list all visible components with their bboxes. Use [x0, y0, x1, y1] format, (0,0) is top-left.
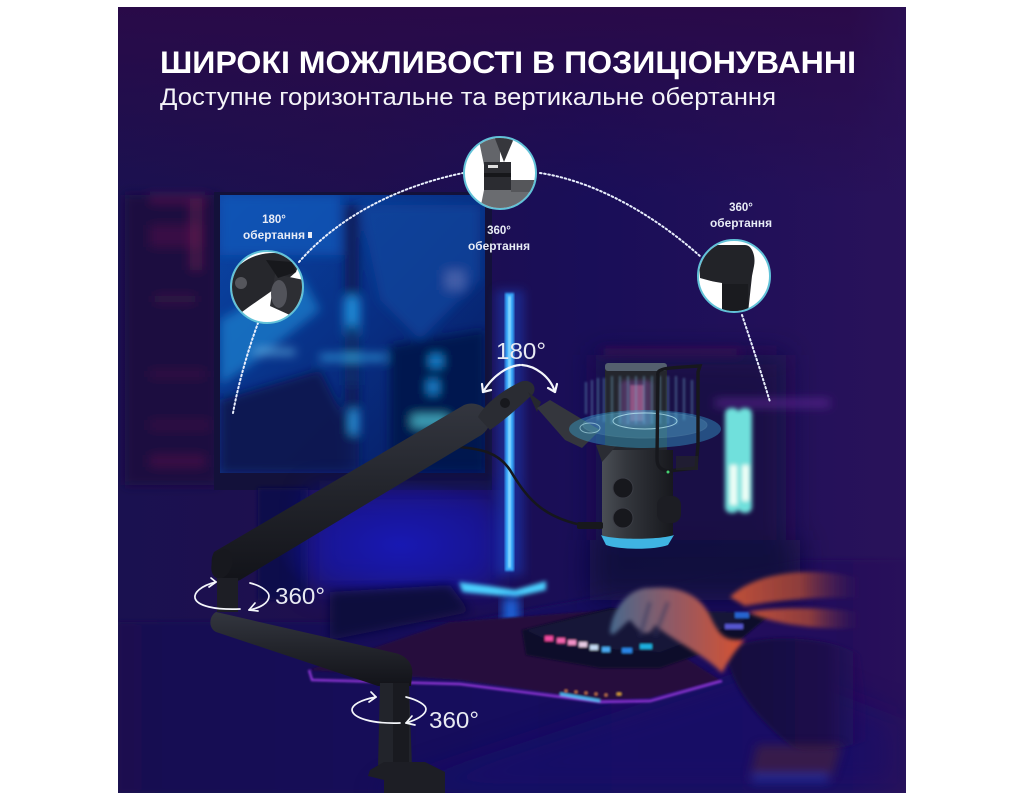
labels: top 360 degree rotation: обертання [468, 241, 530, 253]
callout: top joint detail [464, 136, 536, 210]
labels: right 360 degree rotation: 360° [729, 202, 753, 214]
labels: 180 degree rotation: 180° [262, 214, 286, 226]
panel: gaming desk background photo [118, 7, 906, 793]
knobs [613, 478, 633, 498]
label: upper 360 degrees: 360° [275, 583, 325, 609]
joint column [217, 578, 238, 612]
boom arm cable [460, 447, 600, 528]
labels: top 360 degree rotation [468, 225, 530, 253]
post [378, 683, 412, 767]
microphone [569, 363, 721, 549]
neon light stand [459, 290, 546, 626]
boom arm [207, 381, 600, 793]
labels: right 360 degree rotation [710, 202, 772, 230]
sleeve and forearm [728, 637, 850, 749]
clamp [368, 762, 445, 793]
capsule head [605, 368, 667, 450]
subtitle: Доступне горизонтальне та вертикальне обертання [160, 84, 776, 111]
blue wall glow behind stand [285, 485, 504, 593]
body [602, 450, 673, 547]
neck joint [478, 381, 535, 430]
labels: 180 degree rotation: обертання [243, 230, 305, 242]
sound bars [586, 376, 692, 424]
desk surface [229, 610, 542, 792]
label: 180 degrees: 180° [496, 338, 546, 364]
right edge fade [894, 7, 906, 44]
rotation arrow: lower 360 degrees [352, 692, 426, 725]
usb plug [577, 522, 603, 529]
grille [620, 380, 652, 426]
shock mount link [530, 395, 541, 412]
pop filter [657, 366, 700, 471]
hand on keyboard [610, 588, 745, 673]
second hand [730, 572, 860, 628]
wrist rest lower right [750, 745, 842, 782]
pivot cap [211, 564, 220, 578]
upper arm [212, 403, 490, 582]
dark table edge [538, 687, 880, 790]
title: ШИРОКІ МОЖЛИВОСТІ В ПОЗИЦІОНУВАННІ [160, 44, 856, 80]
callout: left joint detail [228, 251, 308, 323]
PC case glow [590, 355, 800, 600]
dotted rotation arcs [233, 173, 770, 413]
labels: 180 degree rotation [243, 214, 312, 242]
rotation arrow: 180 degrees [482, 365, 557, 392]
labels: top 360 degree rotation: 360° [487, 225, 511, 237]
teal base ring [601, 535, 674, 549]
keyboard [522, 608, 770, 668]
mousepad [309, 610, 722, 702]
monitor [214, 192, 492, 600]
lower arm [210, 612, 412, 686]
shelf on left wall [125, 195, 218, 485]
callout: right joint detail [698, 240, 770, 313]
shoulders [596, 445, 612, 462]
ripple rings [569, 410, 721, 448]
labels: right 360 degree rotation: обертання [710, 218, 772, 230]
desk keyboard back [330, 585, 470, 640]
label: lower 360 degrees: 360° [429, 707, 479, 733]
rotation arrow: upper 360 degrees [195, 578, 269, 611]
